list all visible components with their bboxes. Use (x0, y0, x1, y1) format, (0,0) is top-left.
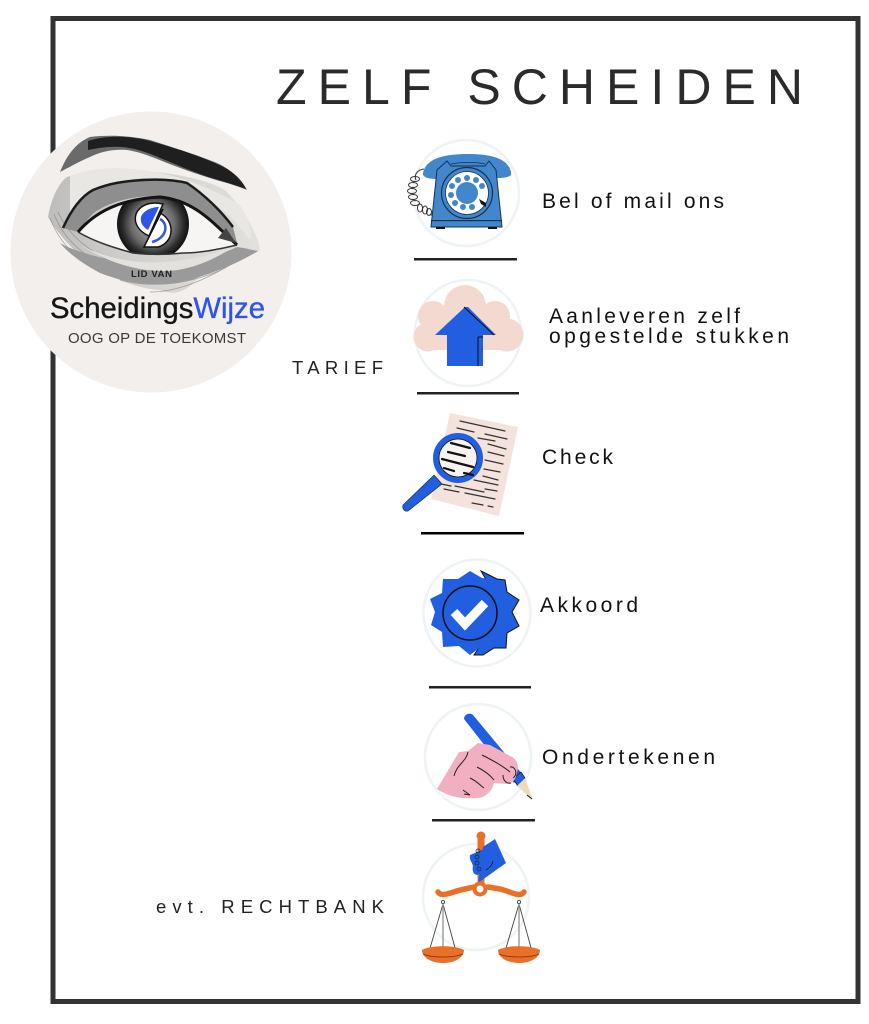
icon: upload arrow (435, 307, 496, 366)
icon: magnifier (403, 436, 480, 511)
eye illustration (48, 136, 260, 293)
step 6: scales of justice (422, 832, 540, 963)
step 2 label: opgestelde stukken (549, 325, 789, 348)
eyeball (78, 197, 237, 254)
icon: telephone (408, 154, 511, 229)
step 1 label: Bel of mail ons (542, 190, 724, 213)
rechtbank label: evt. RECHTBANK (156, 896, 385, 917)
eyebrow (60, 136, 247, 190)
step 3 label: Check (542, 446, 614, 469)
step 4: approval badge (424, 560, 530, 666)
step 2 label: Aanleveren zelf (549, 305, 740, 328)
step 5 label: Ondertekenen (542, 746, 715, 769)
logo tagline: OOG OP DE TOEKOMST (68, 330, 246, 347)
lid van label: LID VAN (131, 269, 172, 280)
icon: scales (422, 832, 540, 963)
icon: hand (437, 743, 518, 798)
step 3: document with magnifier (403, 413, 518, 516)
step 1: phone (408, 140, 519, 246)
title: ZELF SCHEIDEN (276, 59, 803, 115)
icon: book and hand (470, 839, 506, 883)
step 5: signing hand (425, 704, 533, 810)
icon: badge (430, 571, 519, 655)
logo wordmark: ScheidingsWijze (50, 292, 265, 325)
iris logo (135, 203, 171, 247)
icon: document (431, 413, 518, 516)
step 4 label: Akkoord (540, 594, 638, 617)
lower lid (60, 243, 258, 284)
logo badge (10, 112, 292, 392)
step 2 label (549, 305, 789, 348)
tarief label: TARIEF (292, 357, 383, 378)
step 2: upload cloud (414, 280, 524, 386)
icon: cloud (414, 285, 524, 352)
icon: pen (464, 714, 533, 800)
upper lid (63, 180, 237, 243)
